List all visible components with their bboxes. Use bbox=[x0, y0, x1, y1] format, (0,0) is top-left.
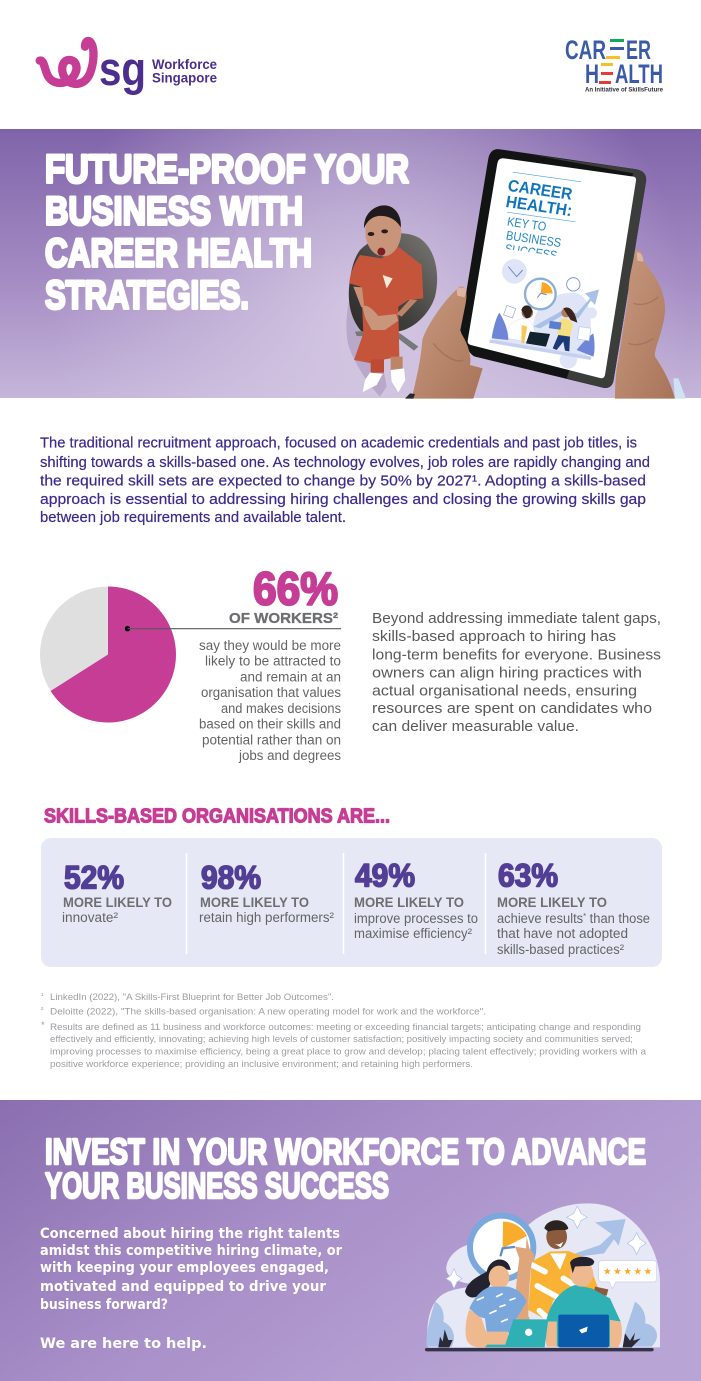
stat label: of workers: OF WORKERS² bbox=[229, 610, 338, 627]
tablet cover artwork bbox=[489, 259, 599, 369]
illustration: team with laptops bbox=[427, 1203, 660, 1350]
title bbox=[45, 148, 409, 318]
footnotes: positive workforce experience; providing an inclusive environment; and retaining high performers. bbox=[50, 1058, 473, 1069]
call to action text: amidst this competitive hiring climate, or bbox=[40, 1243, 342, 1259]
footnotes: LinkedIn (2022), "A Skills-First Blueprint for Better Job Outcomes". bbox=[50, 991, 334, 1002]
call to action text: with keeping your employees engaged, bbox=[40, 1260, 329, 1276]
tablet cover title: CAREER bbox=[507, 176, 574, 204]
tablet body bbox=[460, 149, 646, 388]
stat column: 63%: * bbox=[583, 912, 586, 921]
logo: Workforce Singapore: Workforce bbox=[152, 56, 217, 72]
intro paragraph bbox=[40, 434, 650, 526]
tablet cover title: KEY TO bbox=[506, 215, 548, 234]
stat description: potential rather than on bbox=[202, 732, 341, 748]
tablet cover title: SUCCESS bbox=[504, 242, 558, 263]
desk line bbox=[427, 1345, 652, 1355]
stat column: 63% bbox=[497, 858, 650, 957]
intro paragraph: The traditional recruitment approach, focused on academic credentials and past job titles, is bbox=[40, 434, 637, 452]
tablet cover title: BUSINESS bbox=[505, 229, 562, 250]
footnotes bbox=[41, 991, 647, 1069]
footnotes: improving processes to maximise efficiency, being a great place to grow and develop; placing talent effectively; providing workers with a bbox=[50, 1046, 647, 1056]
title: BUSINESS WITH bbox=[45, 190, 303, 234]
title: CAREER HEALTH bbox=[45, 232, 312, 276]
stat column: 52%: 52% bbox=[64, 860, 124, 896]
paragraph: long-term benefits: long-term benefits for everyone. Business bbox=[372, 646, 661, 664]
seated man bbox=[545, 1257, 622, 1347]
stat column: 49%: MORE LIKELY TO bbox=[354, 894, 464, 910]
logo: Career Health: CAR bbox=[565, 35, 606, 65]
stat column: 49%: improve processes to bbox=[354, 911, 478, 926]
stat description bbox=[199, 638, 341, 763]
laptops bbox=[485, 1319, 548, 1347]
stat column: 63%: achieve results bbox=[497, 911, 587, 926]
stat description: and makes decisions bbox=[221, 701, 341, 716]
rating bubble: ★★★★★ bbox=[603, 1267, 653, 1278]
illustration: seated woman bbox=[346, 205, 437, 397]
stat column: 98% bbox=[199, 860, 334, 925]
standing man bbox=[515, 1220, 598, 1320]
paragraph: long-term benefits: Beyond addressing immediate talent gaps, bbox=[372, 610, 661, 627]
panel: call to action bbox=[0, 1100, 701, 1381]
background blob bbox=[427, 1203, 660, 1347]
call to action text bbox=[40, 1226, 342, 1352]
illustration: hands holding tablet bbox=[405, 149, 686, 399]
stat column: 63%: MORE LIKELY TO bbox=[497, 894, 607, 910]
stat column: 52%: innovate² bbox=[62, 910, 118, 925]
tablet cover title: HEALTH: bbox=[504, 192, 574, 220]
panel: hero banner bbox=[0, 129, 701, 399]
call to action heading bbox=[45, 1131, 646, 1206]
heading: skills-based organisations: SKILLS-BASED ORGANISATIONS ARE... bbox=[44, 806, 390, 828]
tablet cover title bbox=[496, 172, 582, 268]
stat column: 49%: maximise efficiency² bbox=[354, 926, 472, 941]
panel: skills-based statistics bbox=[41, 838, 662, 967]
clock bbox=[470, 1216, 533, 1279]
stat column: 98%: retain high performers² bbox=[199, 910, 334, 925]
logo: Career Health: H bbox=[585, 59, 599, 89]
sparkles bbox=[446, 1206, 646, 1289]
paragraph: long-term benefits: skills-based approach to hiring has bbox=[372, 628, 616, 645]
intro paragraph: the required skill sets are expected to change by 50% by 2027¹. Adopting a skills-based bbox=[40, 472, 646, 490]
stat column: 49% bbox=[354, 858, 478, 941]
seated woman bbox=[465, 1260, 530, 1347]
stat description: and remain at an bbox=[240, 670, 341, 684]
stat column: 63%: skills-based practices² bbox=[497, 942, 624, 957]
stat description: likely to be attracted to bbox=[205, 654, 341, 668]
call to action text: business forward? bbox=[40, 1297, 168, 1313]
footnotes: effectively and efficiently, innovating; achieving high levels of customer satisfaction; positively impacting society and communities served; bbox=[50, 1033, 633, 1044]
stat description: based on their skills and bbox=[199, 716, 341, 732]
stat column: 49%: 49% bbox=[355, 858, 415, 894]
tablet screen bbox=[468, 158, 636, 378]
title: STRATEGIES. bbox=[45, 274, 249, 318]
intro paragraph: between job requirements and available talent. bbox=[40, 509, 346, 526]
stat column: 63%: than those bbox=[586, 911, 650, 926]
call to action heading: YOUR BUSINESS SUCCESS bbox=[45, 1165, 389, 1206]
stat column: 52% bbox=[62, 860, 172, 925]
footnotes: Results are defined as 11 business and workforce outcomes: meeting or exceeding financial targets; anticipating change and responding bbox=[50, 1021, 641, 1032]
plants bbox=[427, 1302, 454, 1347]
paragraph: long-term benefits: resources are spent on candidates who bbox=[372, 700, 652, 717]
stat column: 98%: 98% bbox=[201, 860, 261, 896]
call to action text: motivated and equipped to drive your bbox=[40, 1279, 326, 1295]
paragraph: long-term benefits: actual organisational needs, ensuring bbox=[372, 682, 637, 700]
logo: Workforce Singapore: Singapore bbox=[152, 70, 217, 86]
intro paragraph: shifting towards a skills-based one. As technology evolves, job roles are rapidly changing and bbox=[40, 454, 650, 471]
right hand bbox=[615, 250, 675, 399]
stat description: say they would be more bbox=[199, 638, 341, 653]
stat column: 63%: that have not adopted bbox=[497, 926, 628, 941]
logo: Career Health: ALTH bbox=[615, 59, 663, 89]
call to action text: We are here to help. bbox=[40, 1336, 207, 1352]
footnotes: Deloitte (2022), "The skills-based organisation: A new operating model for work and the workforce". bbox=[50, 1006, 486, 1016]
title: FUTURE-PROOF YOUR bbox=[45, 148, 409, 192]
footnotes: ¹ bbox=[41, 993, 44, 1000]
footnotes: ² bbox=[41, 1007, 44, 1014]
stat description: jobs and degrees bbox=[238, 748, 341, 763]
logo: Career Health: ER bbox=[626, 35, 651, 65]
stat column: 63%: 63% bbox=[498, 858, 558, 894]
stat: 66%: 66% bbox=[253, 562, 338, 614]
stat column: 98%: MORE LIKELY TO bbox=[200, 894, 309, 910]
logo: Career Health bbox=[565, 35, 663, 94]
stat column: 52%: MORE LIKELY TO bbox=[63, 894, 172, 910]
paragraph: long-term benefits bbox=[372, 610, 661, 735]
pie chart: 66% of workers bbox=[40, 586, 341, 722]
call to action text: Concerned about hiring the right talents bbox=[40, 1226, 340, 1242]
logo: Career Health: An Initiative of SkillsFuture bbox=[585, 86, 663, 94]
logo: Workforce Singapore bbox=[40, 41, 217, 95]
intro paragraph: approach is essential to addressing hiring challenges and closing the growing skills gap bbox=[40, 491, 646, 508]
paragraph: long-term benefits: can deliver measurable value. bbox=[372, 718, 579, 735]
growth arrow bbox=[575, 1219, 626, 1257]
rating bubble bbox=[599, 1261, 657, 1289]
stat description: organisation that values bbox=[201, 685, 341, 700]
footnotes: * bbox=[41, 1019, 45, 1030]
paragraph: long-term benefits: owners can align hiring practices with bbox=[372, 664, 642, 682]
logo: Workforce Singapore: sg bbox=[99, 42, 146, 95]
left hand bbox=[412, 286, 483, 399]
